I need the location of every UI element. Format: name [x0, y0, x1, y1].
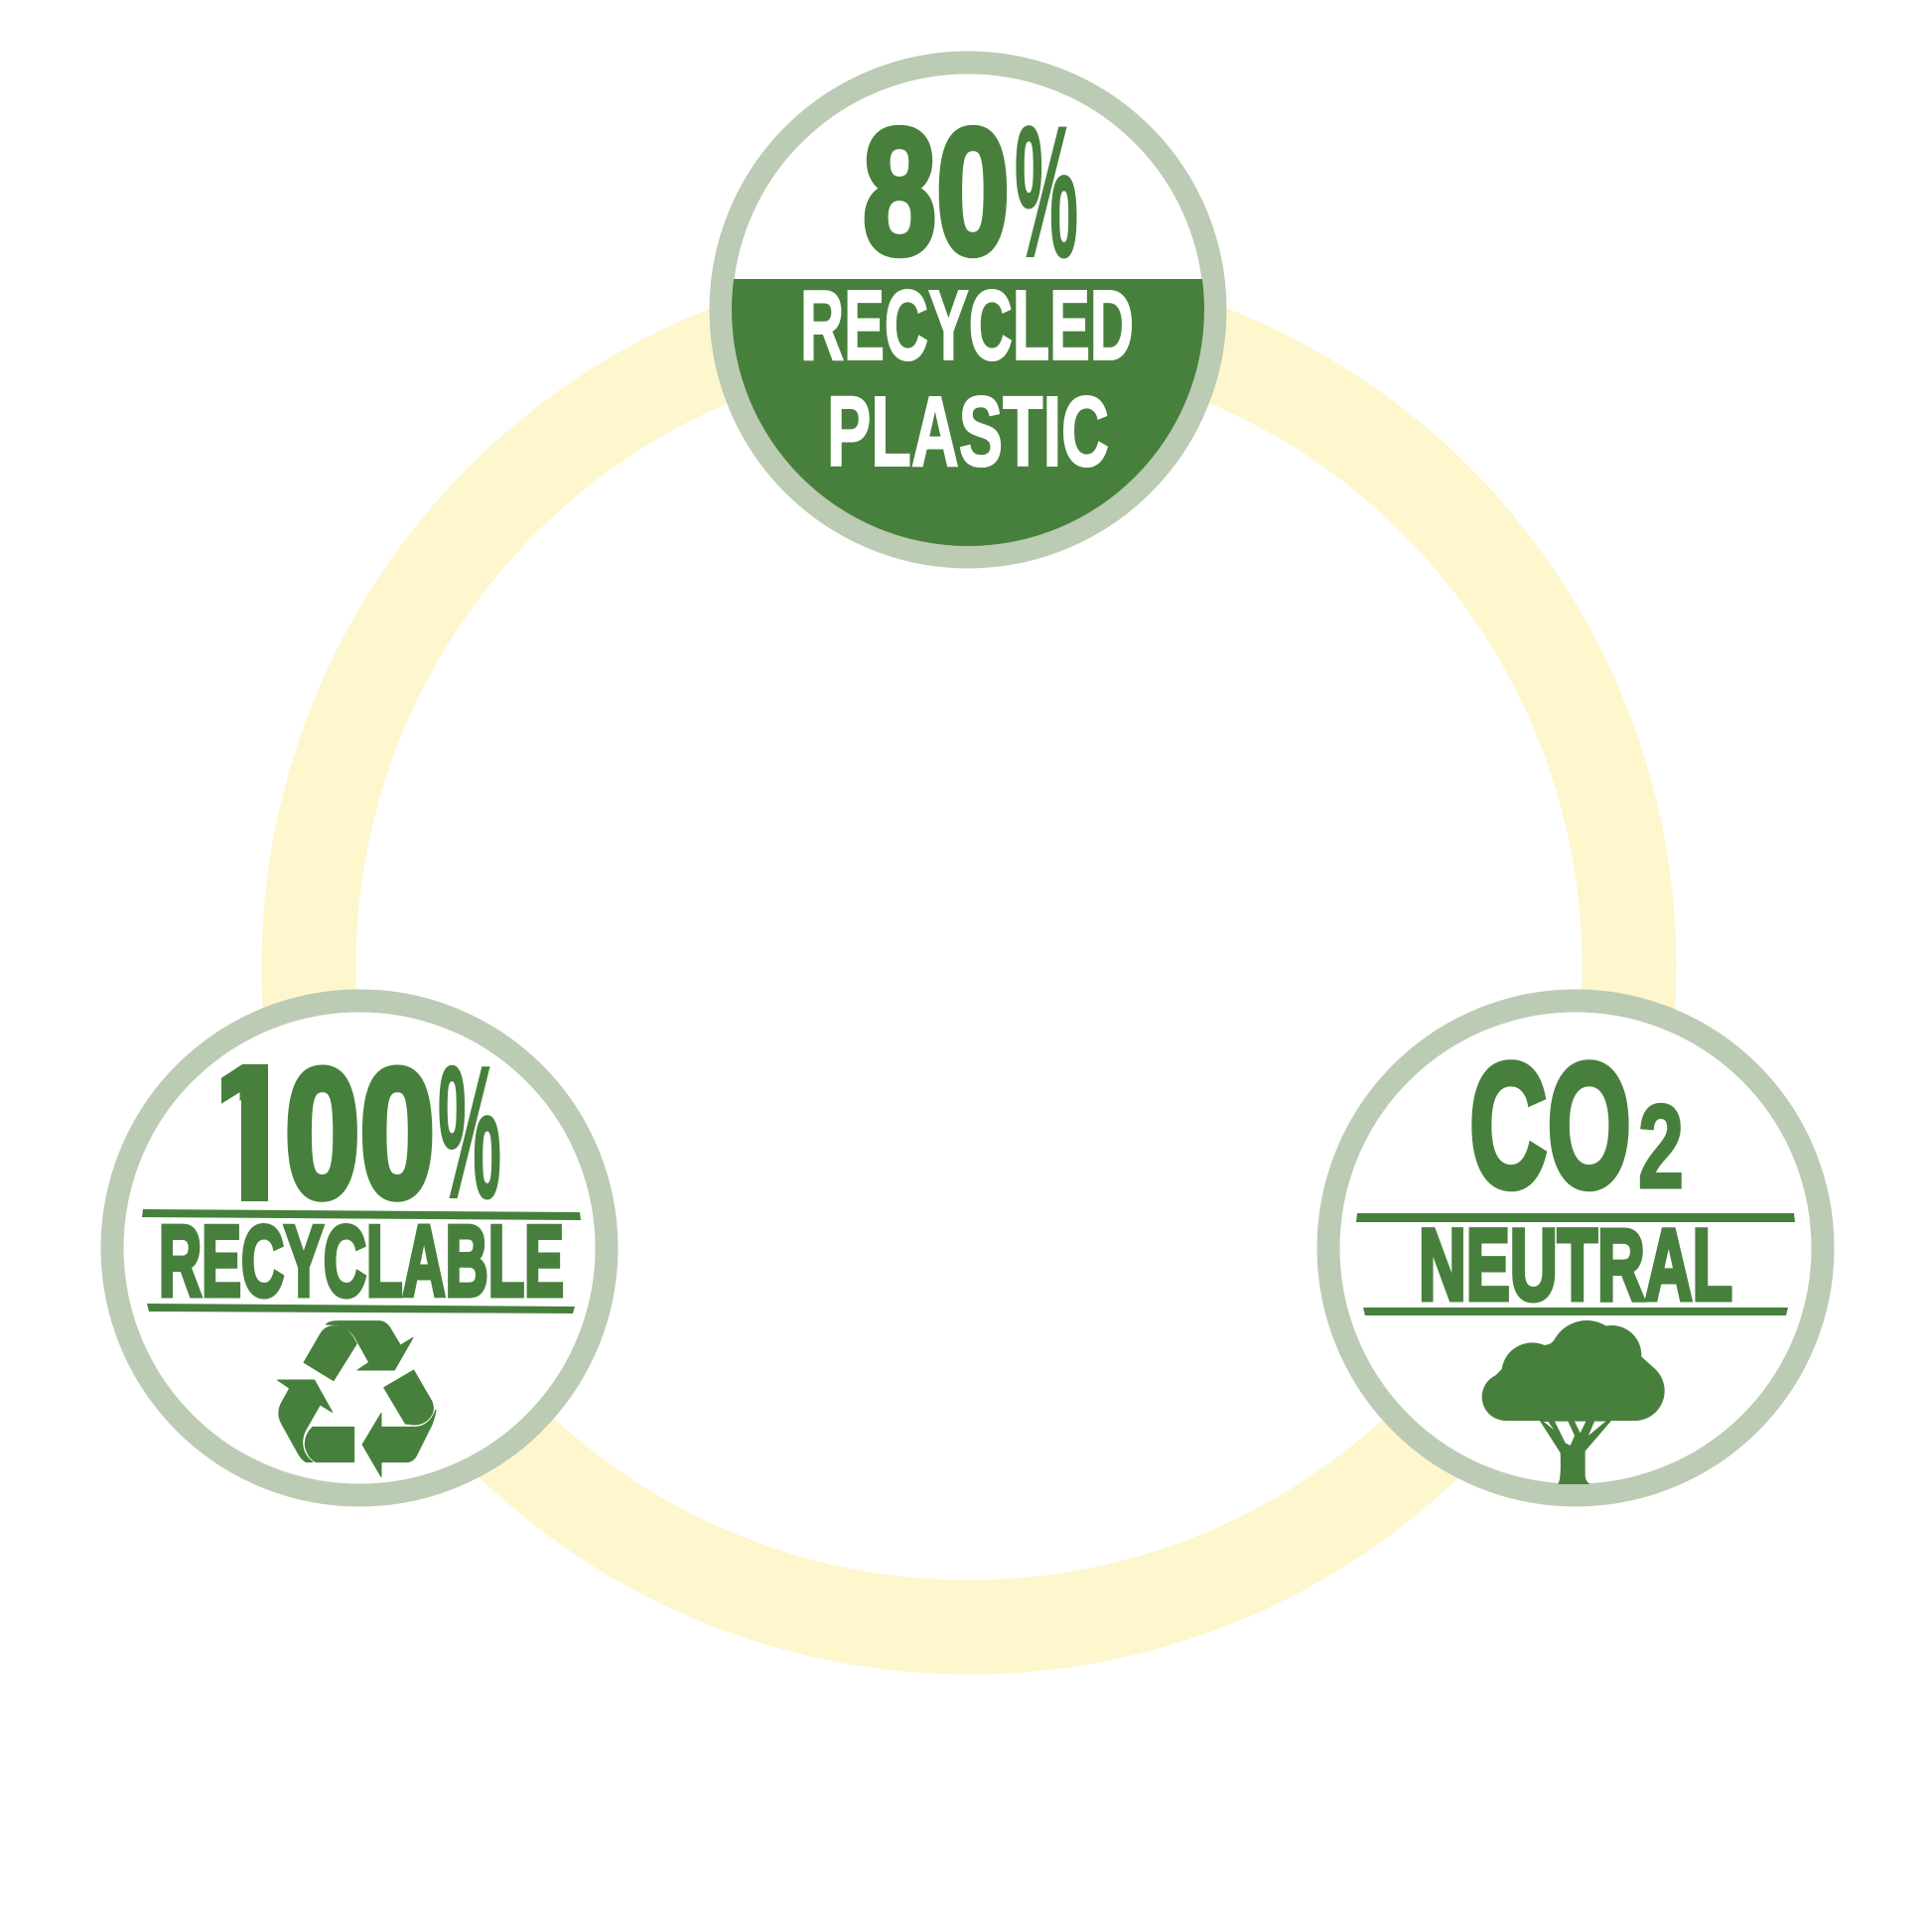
- badge: 80% recycled plastic: %: [1015, 87, 1078, 296]
- heading: 80%: 80: [863, 92, 1010, 292]
- heading: 100%: 00: [285, 1031, 435, 1235]
- heading: 100%: [221, 1064, 500, 1202]
- icon: tree: [1482, 1320, 1665, 1484]
- label: neutral: NEUTRAL: [1419, 1208, 1732, 1321]
- heading: CO2: 2: [1638, 1080, 1684, 1213]
- heading: 100%: 1: [197, 1025, 304, 1241]
- label: recyclable: RECYCLABLE: [159, 1206, 564, 1317]
- green lower segment: [732, 279, 1204, 546]
- badge circle with ring: [721, 63, 1215, 557]
- badge: 80% recycled plastic: [695, 63, 1241, 577]
- badge: 100% recyclable: %: [438, 1028, 501, 1238]
- large yellow connecting ring: [309, 307, 1629, 1627]
- upper rule: [1356, 1213, 1795, 1222]
- badge circle with ring: [112, 1001, 607, 1495]
- heading: CO2: CO: [1469, 1027, 1631, 1224]
- icon: recycling arrows: [277, 1321, 436, 1477]
- lower rule: [147, 1304, 575, 1313]
- upper rule: [142, 1209, 581, 1220]
- lower rule: [1363, 1308, 1788, 1315]
- badge: CO2 neutral: [1328, 1001, 1823, 1495]
- badge circle with ring: [1328, 1001, 1823, 1495]
- label: recycled: RECYCLED: [800, 270, 1134, 381]
- badge: 100% recyclable: [112, 1001, 607, 1495]
- label: plastic: PLASTIC: [827, 376, 1109, 487]
